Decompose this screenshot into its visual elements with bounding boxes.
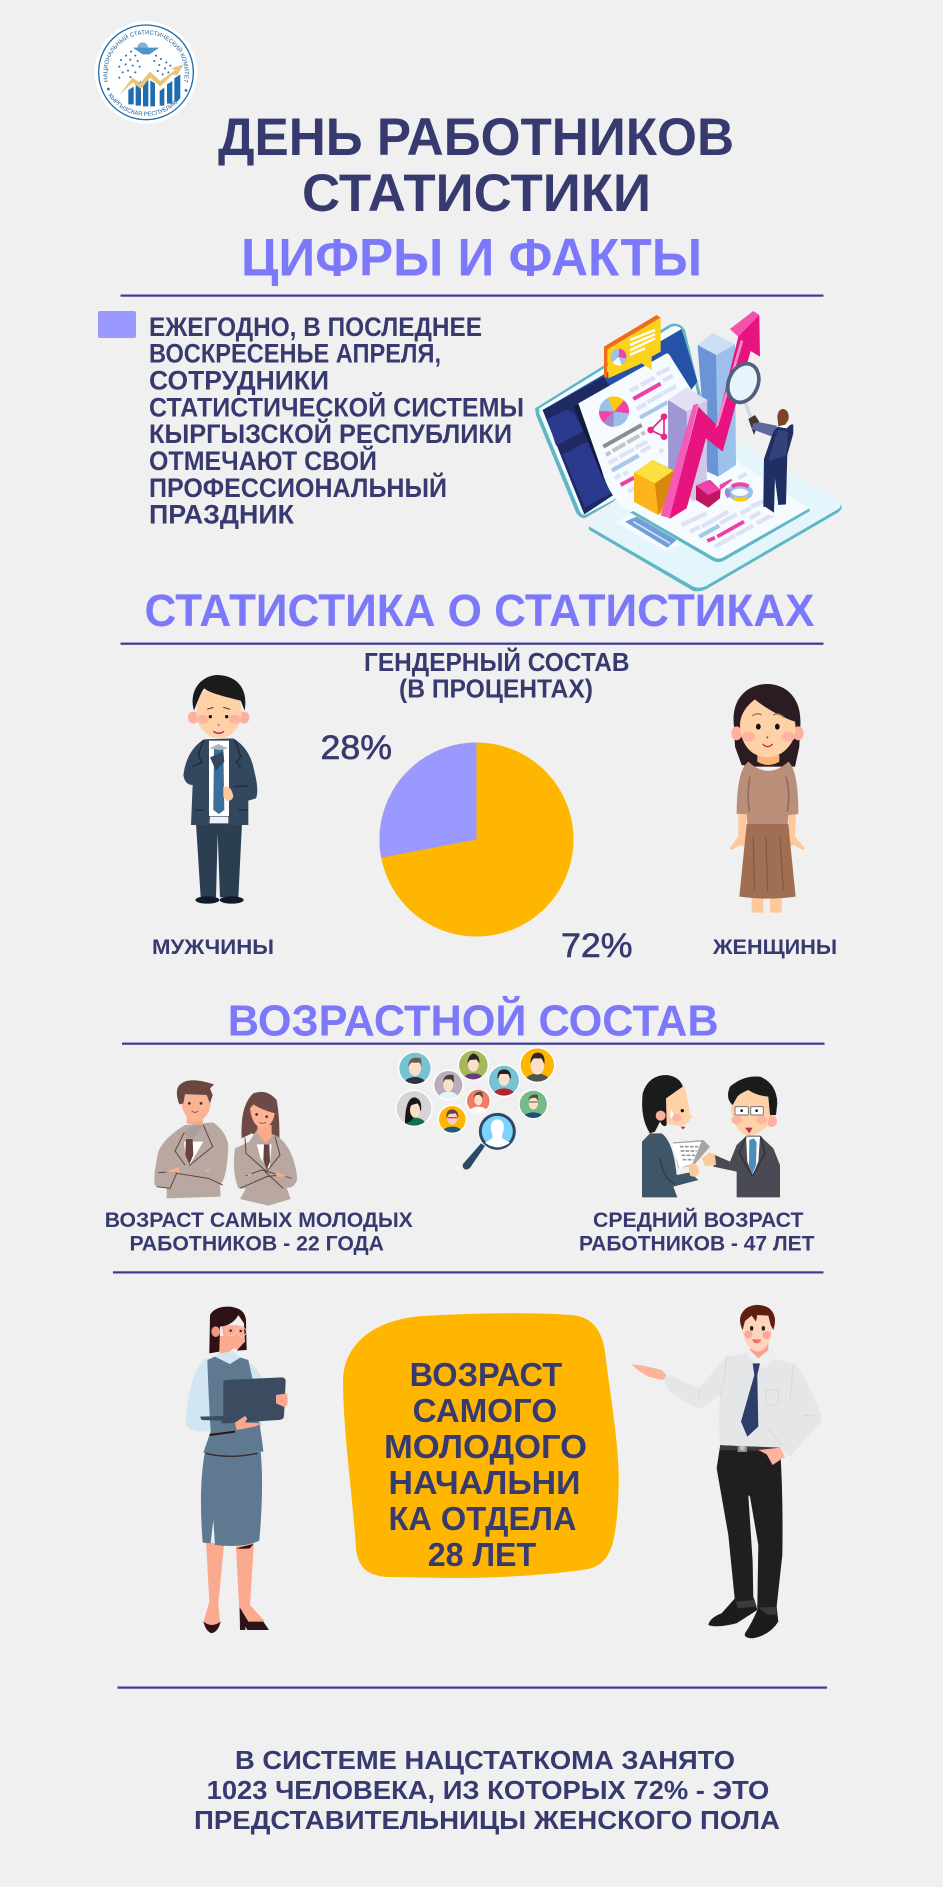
icon: young colleagues pair [154,1080,297,1206]
icon: statistics committee logo [94,21,198,124]
paper report sheet [574,353,810,562]
callout: youngest department head [343,1313,619,1578]
analyst with magnifier [722,359,793,516]
pie chart [320,729,574,936]
footer statement [194,1745,780,1835]
intro paragraph: ЕЖЕГОДНО, В ПОСЛЕДНЕЕ [149,312,482,342]
icon: woman with laptop [186,1307,288,1633]
bullet square [98,311,136,338]
purple bar [668,388,707,502]
icon: statistics committee logo: НАЦИОНАЛЬНЫЙ СТАТИСТИЧЕСКИЙ КОМИТЕТ [103,30,189,83]
intro paragraph: ОТМЕЧАЮТ СВОЙ [149,445,377,476]
intro paragraph: КЫРГЫЗСКОЙ РЕСПУБЛИКИ [149,418,512,449]
yellow bar [634,460,673,515]
title: СТАТИСТИКИ [302,164,651,223]
caption: youngest employees age [105,1208,413,1256]
callout: youngest department head: КА ОТДЕЛА [388,1500,576,1537]
icon: colleagues handshake with documents [642,1075,780,1197]
illustration: laptop with charts and analyst [535,311,842,591]
title: ДЕНЬ РАБОТНИКОВ [218,108,734,167]
icon: man in shirt presenting [632,1305,822,1638]
donut chart [727,484,751,500]
caption: average age [579,1207,814,1256]
label: women: ЖЕНЩИНЫ [712,936,837,959]
callout: youngest department head: САМОГО [413,1392,557,1429]
pink cube [696,479,733,508]
callout: youngest department head: МОЛОДОГО [384,1428,587,1465]
label: men: МУЖЧИНЫ [152,936,274,959]
caption: youngest employees age: ВОЗРАСТ САМЫХ МОЛОДЫХ [105,1208,413,1232]
intro paragraph: ПРОФЕССИОНАЛЬНЫЙ [149,472,447,503]
intro paragraph: СТАТИСТИЧЕСКОЙ СИСТЕМЫ [149,392,524,422]
magnifier [463,1114,514,1169]
caption: average age: СРЕДНИЙ ВОЗРАСТ [593,1207,804,1232]
heading: statistics about statisticians: СТАТИСТИКА О СТАТИСТИКАХ [144,585,814,636]
chart heading: gender composition: (В ПРОЦЕНТАХ) [399,674,593,704]
callout: youngest department head: 28 ЛЕТ [428,1536,536,1573]
subtitle: ЦИФРЫ И ФАКТЫ [241,228,702,288]
icon: man in suit [183,675,257,904]
keyboard base [589,442,842,591]
caption: average age: РАБОТНИКОВ - 47 ЛЕТ [579,1232,814,1256]
icon: woman in skirt [729,684,805,913]
heading: age composition: ВОЗРАСТНОЙ СОСТАВ [228,994,719,1046]
speech bubble [604,315,661,378]
intro paragraph: ВОСКРЕСЕНЬЕ АПРЕЛЯ, [149,338,441,368]
icon: avatars and magnifier [395,1047,557,1169]
blue bar [698,333,736,477]
callout: youngest department head: НАЧАЛЬНИ [388,1464,580,1501]
intro paragraph: СОТРУДНИКИ [149,366,329,396]
intro paragraph: ПРАЗДНИК [149,500,295,530]
pink arrow [661,311,760,519]
icon: statistics committee logo: КЫРГЫЗСКАЯ РЕСПУБЛИКА [108,93,180,116]
chart heading: gender composition: ГЕНДЕРНЫЙ СОСТАВ [364,647,630,677]
footer statement: В СИСТЕМЕ НАЦСТАТКОМА ЗАНЯТО [235,1745,735,1775]
infographic canvas [94,21,842,1834]
label: 28 percent: 28% [320,729,392,767]
chart heading: gender composition [364,647,630,704]
caption: youngest employees age: РАБОТНИКОВ - 22 ГОДА [130,1232,384,1256]
intro paragraph [149,312,524,530]
title [218,108,734,223]
label: 72 percent: 72% [561,927,632,965]
laptop screen [535,324,703,518]
callout: youngest department head: ВОЗРАСТ [410,1356,562,1393]
footer statement: ПРЕДСТАВИТЕЛЬНИЦЫ ЖЕНСКОГО ПОЛА [194,1805,780,1835]
footer statement: 1023 ЧЕЛОВЕКА, ИЗ КОТОРЫХ 72% - ЭТО [207,1775,769,1805]
